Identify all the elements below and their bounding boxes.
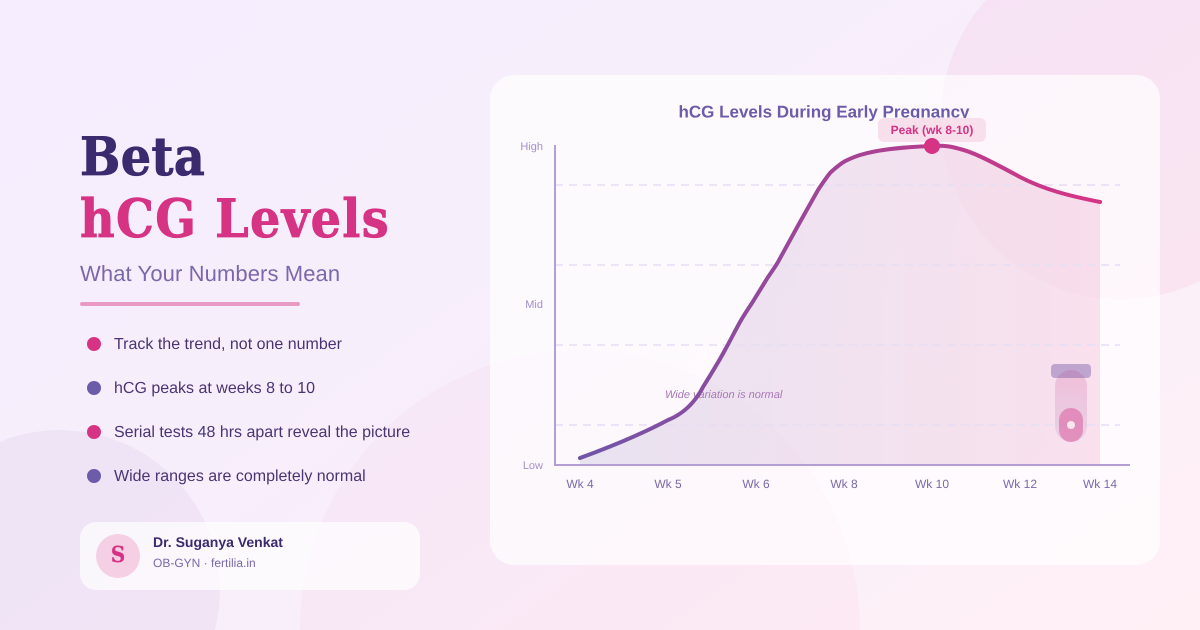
annotation: Wide variation is normal [665,389,783,401]
grid lines [555,185,1120,425]
avatar [96,534,140,578]
x axis labels: Wk 10 [915,477,949,491]
icon: test tube [1051,364,1091,442]
axes [555,145,1130,465]
hCG curve [580,146,1100,458]
divider [80,302,300,306]
chart title: hCG Levels During Early Pregnancy [679,102,970,122]
avatar: S [111,542,125,568]
y axis labels: Mid [525,299,543,311]
author card [80,522,420,590]
title: Beta [80,126,205,188]
bullet 2: hCG peaks at weeks 8 to 10 [114,380,315,397]
title [80,126,390,250]
x axis labels: Wk 14 [1083,477,1117,491]
bullet 3: Serial tests 48 hrs apart reveal the picture [114,424,410,441]
peak marker [924,138,940,154]
bullet 4: Wide ranges are completely normal [114,468,366,485]
bullet 1: Track the trend, not one number [114,336,342,353]
bullet list [87,336,410,485]
area under curve [580,146,1100,465]
title: hCG Levels [80,188,390,250]
author role: OB-GYN · fertilia.in [153,556,256,570]
peak label: Peak (wk 8-10) [891,123,973,137]
chart panel [490,75,1160,565]
author name: Dr. Suganya Venkat [153,534,283,550]
peak label [878,118,986,142]
y axis labels [520,141,543,472]
y axis labels: High [520,141,543,153]
subtitle: What Your Numbers Mean [80,261,340,286]
x axis labels: Wk 8 [830,477,858,491]
y axis labels: Low [523,460,543,472]
x axis labels: Wk 5 [654,477,682,491]
x axis labels: Wk 6 [742,477,770,491]
x axis labels [566,477,1117,491]
x axis labels: Wk 12 [1003,477,1037,491]
x axis labels: Wk 4 [566,477,594,491]
